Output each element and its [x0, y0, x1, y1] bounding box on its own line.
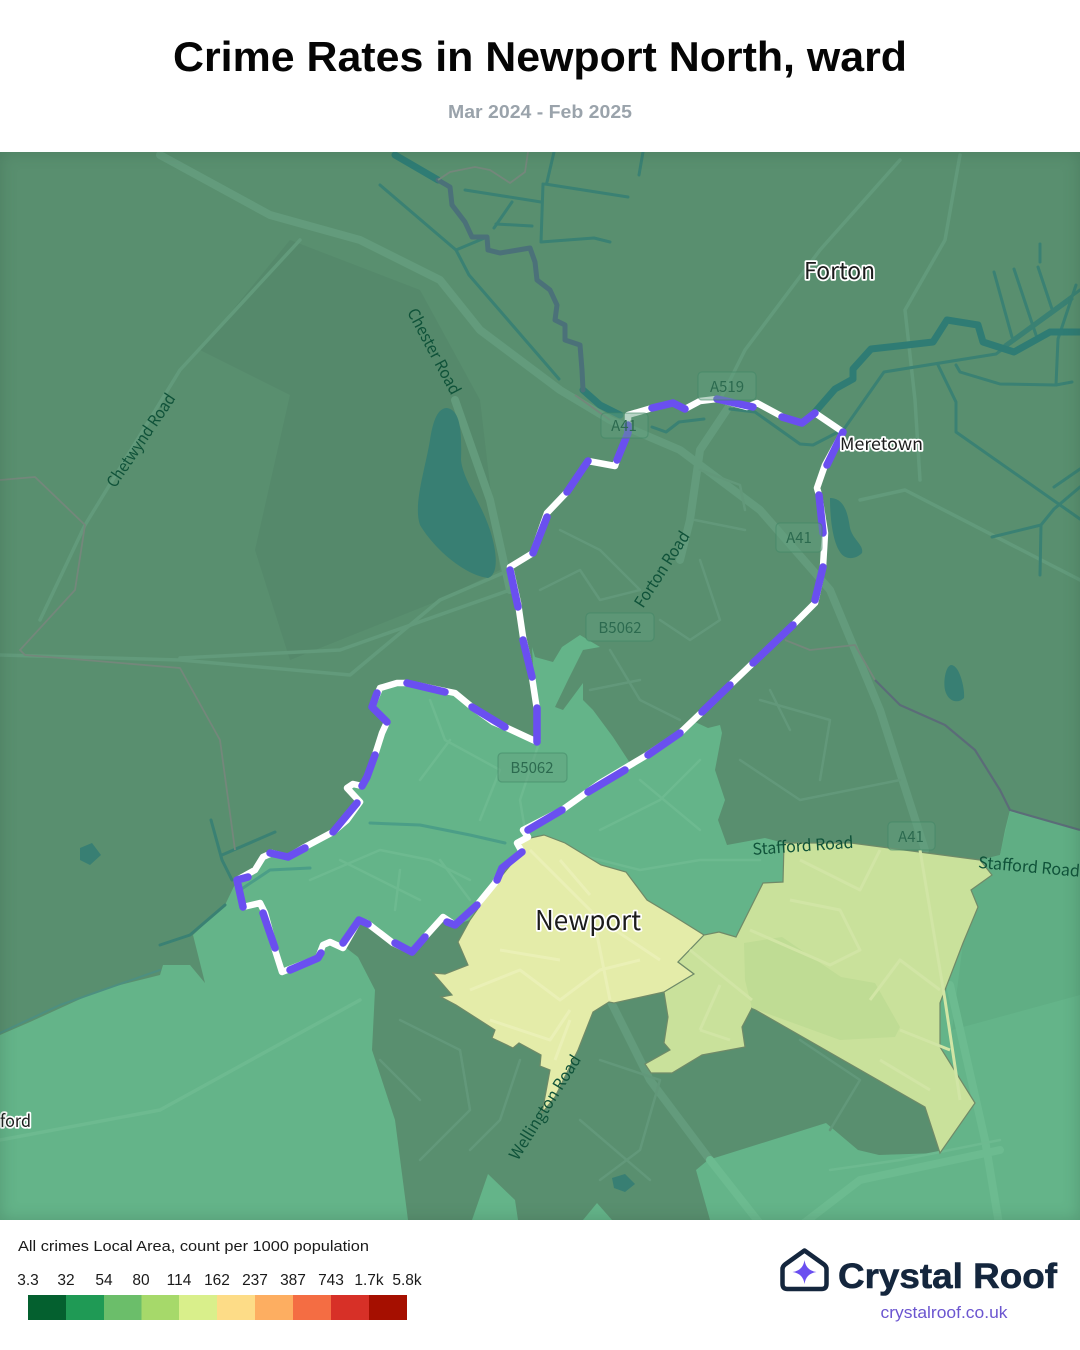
road label: Chester Road: Chester Road: [402, 303, 468, 398]
shield: B5062 north: [586, 613, 654, 641]
logo: Crystal Roof: [782, 1250, 1057, 1322]
brand name: Crystal Roof: [838, 1257, 1057, 1296]
right-side field shading: [952, 812, 1080, 1030]
water: lakes: [80, 408, 964, 1192]
choropleth: Newport yellow area: [433, 835, 704, 1113]
pale area shading and streets: [470, 850, 960, 1100]
shield: A41 north: [601, 413, 648, 438]
shield: A519: [698, 372, 756, 400]
map panel: [0, 152, 1080, 1230]
legend scale labels: 3.3: [17, 1272, 39, 1289]
place label: Forton: Forton: [804, 252, 875, 286]
legend scale labels: 162: [204, 1272, 230, 1289]
shield: A41 south: A41: [898, 826, 924, 847]
legend scale labels: 5.8k: [392, 1272, 422, 1289]
legend title: All crimes Local Area, count per 1000 population: [18, 1238, 369, 1255]
subtitle: date range: Mar 2024 - Feb 2025: [448, 102, 632, 122]
shield: A41 north: A41: [611, 415, 637, 436]
shield: A41 east: [776, 523, 822, 552]
road shields: [498, 372, 935, 850]
legend scale labels: 80: [132, 1272, 150, 1289]
legend scale labels: 387: [280, 1272, 306, 1289]
place label: Newport: Newport: [535, 899, 641, 938]
administrative boundaries: [0, 152, 1080, 850]
road label: Chetwynd Road: Chetwynd Road: [99, 388, 180, 491]
choropleth: mid-green areas: [0, 635, 1080, 1220]
shield: B5062 south: [498, 753, 567, 782]
icon: house with star: [782, 1250, 826, 1289]
shield: B5062 south: B5062: [510, 757, 554, 778]
ward boundary: Newport North: [237, 399, 843, 972]
place names: [0, 252, 923, 1132]
title: Crime Rates in Newport North, ward: [173, 33, 907, 80]
road label: Forton Road: Forton Road: [627, 526, 695, 612]
legend scale labels: 1.7k: [354, 1272, 384, 1289]
farmland shading: [200, 240, 500, 660]
place label: Meretown: Meretown: [840, 430, 923, 455]
legend colour bar: [28, 1295, 407, 1320]
road label: Wellington Road: Wellington Road: [502, 1049, 586, 1164]
road names: [99, 303, 1080, 1164]
legend scale labels: 54: [95, 1272, 113, 1289]
legend scale labels: 114: [167, 1272, 192, 1289]
legend scale labels: [17, 1272, 422, 1289]
legend: [17, 1238, 422, 1320]
map edge vignette: [0, 152, 1080, 1220]
shield: A519: A519: [710, 376, 744, 397]
place label: Stafford fragment: ford: [0, 1107, 31, 1132]
legend scale labels: 237: [242, 1272, 268, 1289]
white boundary line: [237, 399, 843, 972]
shield: A41 east: A41: [786, 527, 812, 548]
shield: A41 south: [888, 822, 935, 850]
water: drains and streams: [0, 152, 1080, 1033]
purple dashes: [237, 399, 843, 970]
choropleth: east Newport pale green area: [645, 843, 992, 1153]
road label: Stafford Road west: Stafford Road: [752, 829, 854, 860]
brand url: crystalroof.co.uk: [880, 1304, 1008, 1322]
legend scale labels: 743: [318, 1272, 344, 1289]
river: [395, 155, 1080, 415]
streets and roads: [0, 155, 1080, 1230]
road label: Stafford Road east: Stafford Road: [977, 849, 1080, 882]
legend scale labels: 32: [57, 1272, 75, 1289]
shield: B5062 north: B5062: [598, 617, 642, 638]
